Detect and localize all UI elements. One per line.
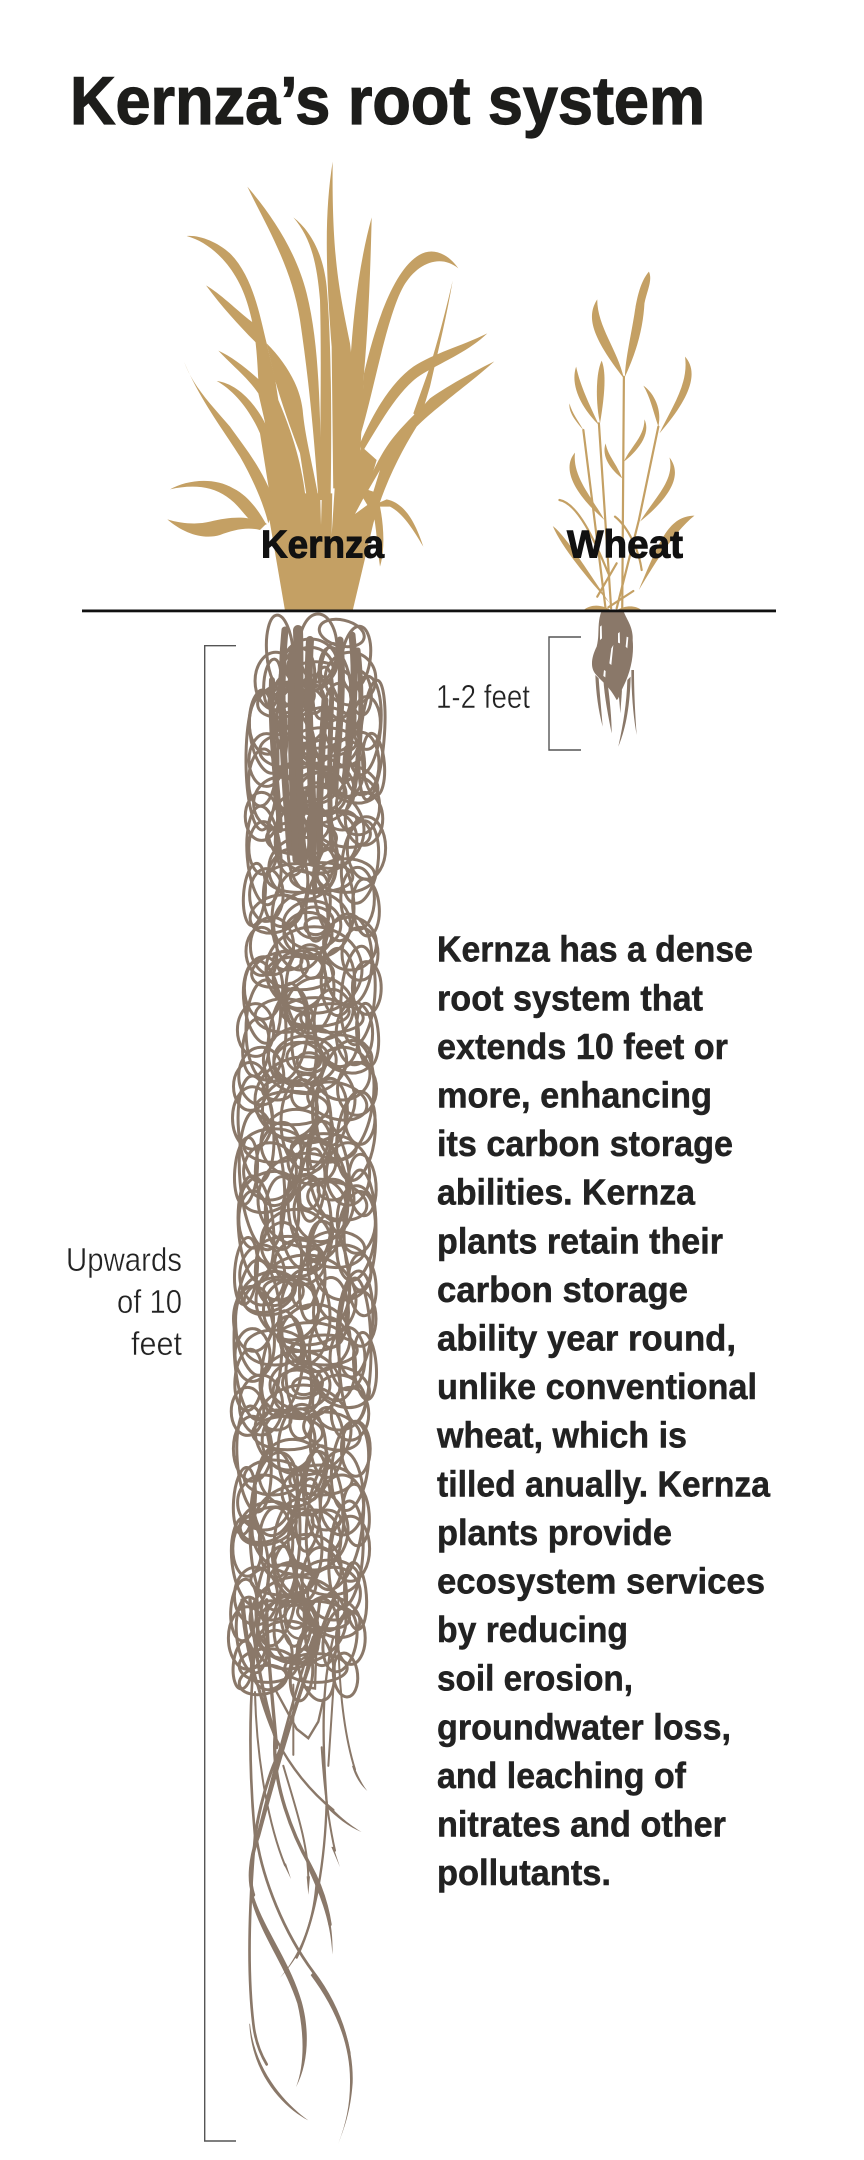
label: Kernza: Kernza (261, 524, 384, 566)
wheat stems (622, 377, 624, 610)
body text: root system that (437, 977, 703, 1018)
body text: ability year round, (437, 1318, 736, 1358)
body text: unlike conventional (437, 1366, 757, 1407)
Kernza tangled roots (227, 614, 387, 1703)
label: Wheat: Wheat (567, 524, 683, 566)
body text: plants provide (437, 1512, 672, 1553)
body text: groundwater loss, (437, 1706, 731, 1747)
body text: soil erosion, (437, 1658, 633, 1699)
wheat plant (553, 272, 694, 610)
body text: more, enhancing (437, 1074, 712, 1116)
title: Kernza’s root system (70, 63, 705, 139)
Kernza dense root core (272, 630, 361, 860)
label: upwards of 10 feet: Upwards (66, 1241, 182, 1278)
body text (436, 929, 771, 1893)
label: 1-2 feet: 1-2 feet (436, 678, 530, 715)
bracket: Kernza depth (205, 646, 236, 2141)
body text: and leaching of (437, 1755, 687, 1796)
wheat leaves (592, 299, 624, 378)
body text: abilities. Kernza (437, 1172, 696, 1213)
ground line (82, 610, 776, 612)
body text: carbon storage (437, 1269, 688, 1310)
label: upwards of 10 feet (66, 1241, 182, 1362)
body text: ecosystem services (437, 1560, 765, 1602)
bracket: wheat depth (549, 637, 581, 750)
body text: Kernza has a dense (437, 929, 753, 970)
body text: tilled anually. Kernza (437, 1463, 771, 1504)
wheat roots (592, 611, 637, 747)
Kernza long tail roots (242, 1596, 367, 2144)
body text: its carbon storage (437, 1123, 733, 1164)
body text: plants retain their (437, 1220, 723, 1261)
body text: pollutants. (437, 1852, 611, 1893)
Kernza grass (167, 162, 494, 611)
body text: wheat, which is (436, 1415, 687, 1456)
label: upwards of 10 feet: feet (131, 1325, 182, 1362)
body text: nitrates and other (437, 1804, 726, 1844)
body text: extends 10 feet or (437, 1026, 728, 1067)
Kernza tall root loops (234, 679, 389, 1610)
chart: root system comparison (66, 162, 776, 2144)
body text: by reducing (437, 1609, 628, 1650)
wheat spikes (625, 272, 650, 377)
label: upwards of 10 feet: of 10 (117, 1283, 182, 1320)
